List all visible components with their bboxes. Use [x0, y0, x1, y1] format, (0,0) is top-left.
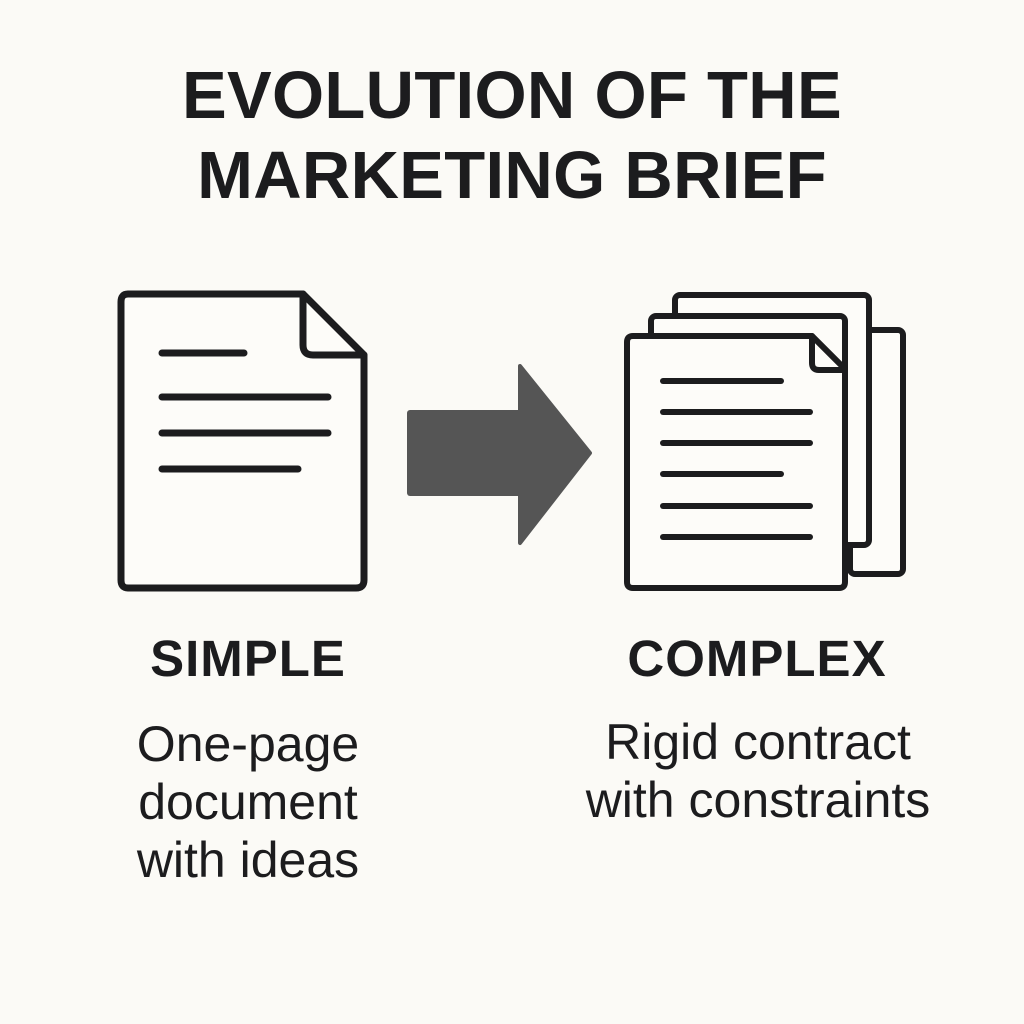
text: complex description: with constraints	[586, 772, 930, 828]
text: simple description: document	[138, 774, 358, 830]
label: complex: COMPLEX	[627, 630, 887, 687]
arrow	[407, 366, 590, 543]
text: complex description	[586, 714, 930, 828]
label: simple: SIMPLE	[150, 630, 346, 687]
text: simple description	[136, 716, 359, 888]
icon: simple document	[121, 294, 364, 588]
title	[182, 58, 842, 213]
text: complex description: Rigid contract	[605, 714, 911, 770]
text: simple description: One-page	[137, 716, 359, 772]
text: simple description: with ideas	[137, 832, 359, 888]
icon: stacked documents	[627, 295, 903, 588]
title: MARKETING BRIEF	[197, 138, 827, 213]
title: EVOLUTION OF THE	[182, 58, 842, 133]
